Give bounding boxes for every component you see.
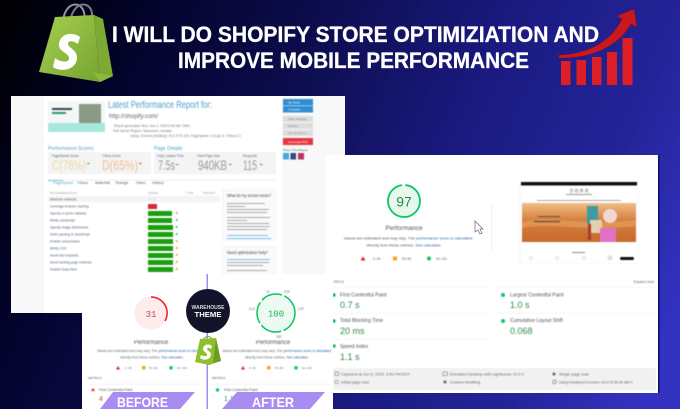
metrics section [332,280,657,362]
metrics rows: First Contentful Paint [224,388,258,392]
legends [116,366,312,370]
tabs: Timings [115,181,128,185]
title: IMPROVE MOBILE PERFORMANCE [178,48,529,73]
gauge: 100: FCP [284,290,290,294]
gauge: 100: 100 [268,310,284,320]
performance scores: YSlow Score [102,154,121,158]
recommendations table [48,191,220,272]
performance labels: Performance [134,340,169,346]
performance scores: PageSpeed Score [52,154,79,158]
performance scores: 7.5s [158,157,175,173]
sidebar buttons: Set Up Alerts [288,131,306,135]
performance scores: 115 [243,157,257,173]
divider [490,205,493,250]
panel: lighthouse performance score 97 [325,155,660,393]
metrics rows [88,376,330,403]
tabs [48,180,276,185]
before banner [100,392,195,409]
before description: directly from these metrics. See calculator. [120,356,184,360]
performance scores [48,146,276,174]
report header: Report generated: Mon, Nov 2, 2020 5:46 AM -0800 [114,124,190,128]
metrics section: 0.7 s [340,300,360,310]
footer info bar [333,368,656,390]
description [344,236,472,248]
description: directly from these metrics. See calculator. [366,242,442,248]
recommendations table: Enable Keep-Alive [50,268,77,272]
legends: 0–49 [125,366,132,370]
panel: before and after comparison [82,274,333,409]
metrics section: TRICS [333,280,344,284]
performance scores: Requests [243,154,257,158]
report header: Test Server Region: Vancouver, Canada [113,129,172,133]
metrics section: 1.0 s [510,300,530,310]
gauge: 100 [249,290,304,339]
tabs: PageSpeed [53,181,73,185]
icon: red growth chart with arrow [559,9,637,85]
score legend: 0–49 [373,257,381,261]
footer info bar: Initial page load [341,380,369,384]
report header: Latest Performance Report for: [108,99,212,111]
legends: 0–49 [249,366,256,370]
center divider [206,274,208,409]
gauge: 97 [387,184,421,218]
panel: speed report [11,96,345,313]
score legend: 90–100 [436,257,447,261]
tabs: YSlow [77,181,88,185]
metrics rows: 1.1 [224,396,234,403]
gauge: 100: SI [266,290,270,294]
footer info bar: Custom throttling [450,380,480,384]
gauge: 31 [134,296,168,330]
warehouse theme badge: WAREHOUSE [192,305,225,311]
performance scores: D(65%) [102,157,138,173]
metrics rows: First Contentful Paint [99,388,133,392]
sidebar buttons: Monitor [288,124,298,128]
recommendations table: Minify JavaScript [50,218,75,222]
sidebar buttons [283,99,313,152]
performance scores: Fully Loaded Time [157,154,184,158]
recommendations table: Leverage browser caching [50,204,89,208]
social icons [283,153,304,160]
icon: shopify bag [39,5,113,82]
recommendations table: Specify a cache validator [50,212,88,216]
sidebar buttons: My Tests [288,100,300,104]
performance labels: Performance [256,340,291,346]
report header [48,99,241,138]
report header: http://shopify.com/ [109,113,158,120]
warehouse theme badge [186,289,230,333]
gauge: 31: 31 [146,310,156,320]
performance scores: C(78%) [52,157,86,173]
optimization help box: Need optimization help? [227,250,269,255]
footer info bar: Captured at Jun 6, 2023, 3:52 PM EDT [341,372,411,376]
website screenshot: 日 出 余 北 [569,187,589,193]
metrics section: Largest Contentful Paint [510,292,564,298]
recommendations table: Avoid landing page redirects [50,260,92,264]
score legend: 50–89 [402,257,411,261]
title: I WILL DO SHOPIFY STORE OPTIMIZIATION AND [112,22,599,47]
recommendations table: Specify image dimensions [50,226,89,230]
footer info bar: Using HeadlessChromium 114.0.5735.90 with lr [559,380,634,384]
metrics section: Expand view [634,280,654,284]
gauge: 97: 97 [396,194,412,210]
after banner [222,392,325,409]
sidebar buttons: Page Settings [288,117,307,121]
performance labels [134,340,291,346]
sidebar buttons: Compare [288,108,301,112]
before description [97,349,206,360]
metrics rows: METRICS [88,376,102,380]
recommendations table: Defer parsing of JavaScript [50,232,90,236]
gauge: 100: TBT [276,335,282,339]
recommendations table: GRADE [148,191,158,195]
sidebar buttons: Download PDF [288,140,308,144]
score legend [360,256,447,261]
gauge: 100: LCP [298,307,304,311]
recommendations table: RECOMMENDATION [50,191,77,195]
recommendations table: TYPE [186,191,193,195]
recommendations table: Avoid bad requests [50,254,79,258]
after description: Values are estimated and may vary. The performance score is calculated [222,349,331,353]
optimization help box [223,247,276,274]
tabs: Video [136,181,146,185]
sidebar buttons: Share This Report: [283,148,308,152]
before description: Values are estimated and may vary. The performance score is calculated [97,349,206,353]
metrics section: Cumulative Layout Shift [510,318,563,324]
legends: 90–100 [302,366,312,370]
cursor icon [475,221,483,234]
description: Values are estimated and may vary. The performance score is calculated [344,236,472,240]
website screenshot [520,182,638,263]
icon: small shopify bag [195,336,221,365]
metrics section: 20 ms [340,326,365,336]
metrics section: First Contentful Paint [340,292,387,298]
report header: Using: Chrome (Desktop) 75.0.3770.100, PageSpeed 1.15-gt1.3, YSlow 2.3 [130,134,241,138]
legends: 50–89 [275,366,284,370]
gauge: 100: CLS [249,307,255,311]
recommendations table: PRIORITY [203,191,216,195]
performance scores: Page Details [154,146,183,152]
metrics rows: 4 [99,396,103,403]
performance label: Performance [385,225,423,232]
scores help box [223,190,276,240]
recommendations table: Minify CSS [50,246,67,250]
footer info bar: Emulated Desktop with Lighthouse 10.2.0 [450,372,525,376]
metrics section: Speed Index [340,344,369,350]
metrics section: 0.068 [510,326,533,336]
after description: directly from these metrics. See calculator. [245,356,309,360]
recommendations table: Enable compression [50,240,80,244]
after description [222,349,331,360]
metrics section: 1.1 s [340,352,360,362]
tabs: Waterfall [95,181,110,185]
legends: 50–89 [149,366,158,370]
recommendations table: Minimize redirects [50,198,77,202]
performance scores: 940KB [198,157,227,173]
legends: 90–100 [177,366,187,370]
footer info bar: Single page load [559,372,589,376]
tabs: History [152,181,164,185]
title [112,22,599,73]
metrics section: Total Blocking Time [340,318,383,324]
warehouse theme badge: THEME [194,310,222,319]
performance scores: Total Page Size [197,154,220,158]
metrics rows: METRICS [212,376,226,380]
performance scores: Performance Scores [48,146,94,152]
scores help box: What do my scores mean? [227,193,272,198]
